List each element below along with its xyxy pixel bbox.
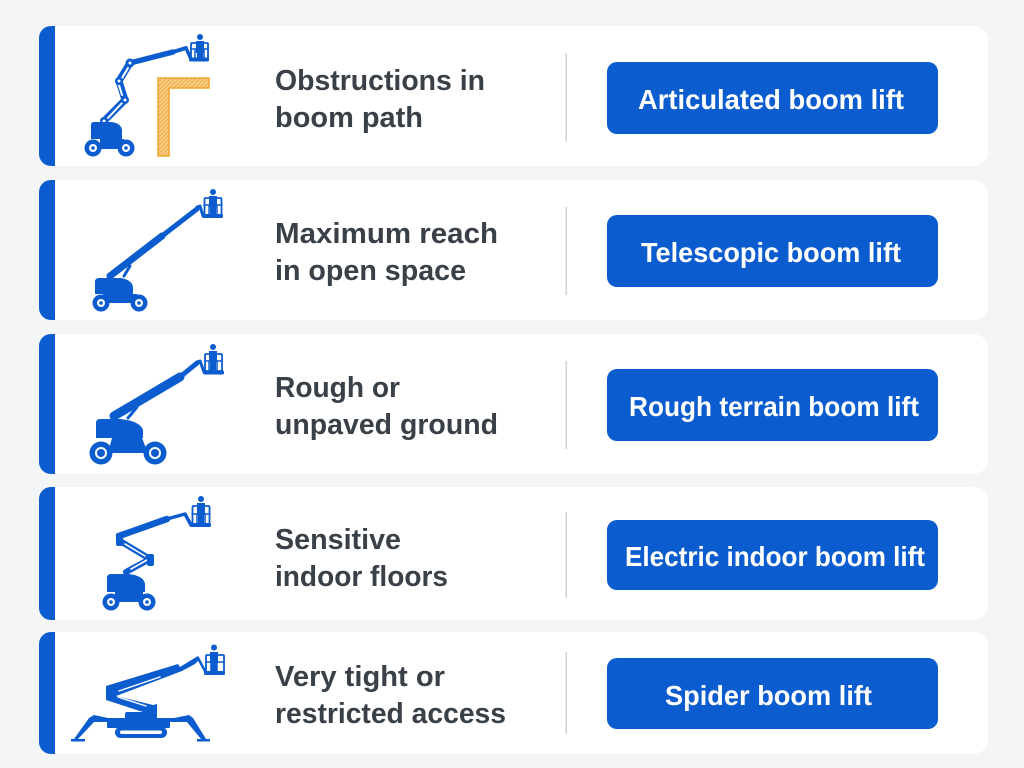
button: spider boom lift: Spider boom lift: [665, 680, 872, 711]
text: condition 2: in open space: [275, 255, 466, 287]
text: condition 5: restricted access: [275, 698, 506, 730]
icon: electric indoor boom lift: [102, 496, 211, 610]
text: condition 3: Rough or: [275, 372, 400, 404]
button: telescopic boom lift: [607, 215, 938, 287]
text: condition 3: unpaved ground: [275, 409, 498, 441]
button: rough terrain boom lift: Rough terrain boom lift: [629, 391, 919, 422]
button: spider boom lift: [607, 658, 938, 729]
button: articulated boom lift: [607, 62, 938, 134]
button: rough terrain boom lift: [607, 369, 938, 441]
text: condition 1: boom path: [275, 102, 423, 134]
text: condition 4: indoor floors: [275, 561, 448, 593]
icon: spider boom lift: [71, 644, 225, 742]
text: condition 4: Sensitive: [275, 524, 401, 556]
button: articulated boom lift: Articulated boom lift: [638, 84, 904, 115]
icon: telescopic boom lift: [92, 189, 223, 312]
icon: articulated boom lift with obstruction: [84, 34, 209, 156]
panel: maximum reach: [39, 180, 988, 320]
icon: rough terrain boom lift: [90, 344, 224, 464]
text: condition 5: Very tight or: [275, 661, 445, 693]
panel: obstructions in boom path: [39, 26, 988, 166]
panel: rough ground: [39, 334, 988, 474]
button: electric indoor boom lift: [607, 520, 938, 590]
button: electric indoor boom lift: Electric indoor boom lift: [625, 541, 925, 572]
button: telescopic boom lift: Telescopic boom lift: [641, 237, 901, 268]
panel: sensitive indoor floors: [39, 487, 988, 620]
panel: tight access: [39, 632, 988, 754]
text: condition 2: Maximum reach: [275, 218, 498, 250]
text: condition 1: Obstructions in: [275, 65, 485, 97]
